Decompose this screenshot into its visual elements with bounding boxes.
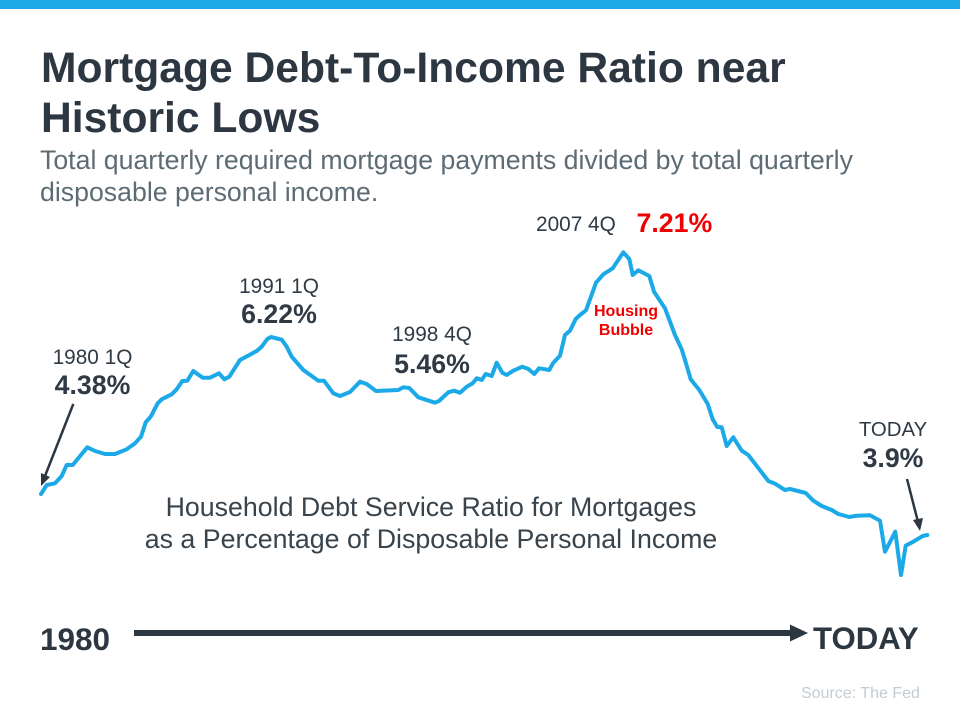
callout: today: 3.9% xyxy=(863,443,923,473)
title: Historic Lows xyxy=(41,94,320,142)
callout: 2007 4Q: 2007 4Q xyxy=(536,213,616,236)
axis label: 1980: 1980 xyxy=(40,621,110,657)
callout: today xyxy=(859,419,927,473)
callout: 2007 4Q xyxy=(536,208,712,238)
callout: housing bubble: Housing xyxy=(594,303,658,320)
callout: 2007 4Q: 7.21% xyxy=(636,208,712,238)
callout: 1998 4Q: 5.46% xyxy=(394,349,470,379)
callout: 1991 1Q xyxy=(239,275,319,329)
subtitle: disposable personal income. xyxy=(40,177,378,207)
arrow: 1980 callout xyxy=(41,404,73,486)
callout: 1998 4Q: 1998 4Q xyxy=(392,323,472,346)
source: Source: The Fed xyxy=(801,685,920,702)
axis label: today: TODAY xyxy=(813,621,919,656)
subtitle: Total quarterly required mortgage payments divided by total quarterly xyxy=(40,145,853,175)
subtitle xyxy=(40,145,853,207)
callout: today: TODAY xyxy=(859,419,927,441)
chart caption: as a Percentage of Disposable Personal Income xyxy=(145,524,717,554)
callout: 1980 1Q: 4.38% xyxy=(55,370,130,400)
chart caption: Household Debt Service Ratio for Mortgages xyxy=(166,492,696,522)
callout: housing bubble xyxy=(594,303,658,339)
data line xyxy=(41,252,927,575)
callout: 1998 4Q xyxy=(392,323,472,379)
callout: housing bubble: Bubble xyxy=(599,322,653,339)
callout: 1991 1Q: 6.22% xyxy=(241,299,317,329)
title xyxy=(41,44,786,142)
title: Mortgage Debt-To-Income Ratio near xyxy=(41,44,786,92)
callout: 1991 1Q: 1991 1Q xyxy=(239,275,319,298)
top bar xyxy=(0,0,960,9)
chart caption xyxy=(145,492,717,554)
callout: 1980 1Q xyxy=(53,346,132,400)
timeline arrow xyxy=(134,624,808,642)
arrow: today callout xyxy=(907,479,923,531)
callout: 1980 1Q: 1980 1Q xyxy=(53,346,132,369)
